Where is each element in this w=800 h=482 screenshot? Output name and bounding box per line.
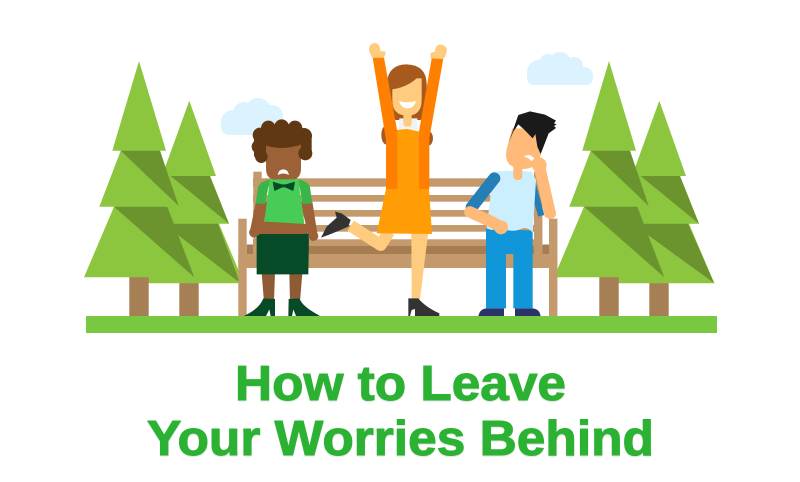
shoes — [244, 298, 320, 316]
front tree — [554, 61, 664, 316]
kicked leg — [351, 226, 389, 245]
tree group: right — [554, 61, 714, 316]
collar — [398, 118, 418, 133]
skirt — [257, 233, 309, 274]
park bench — [238, 172, 557, 316]
fringe — [387, 66, 418, 90]
hair — [509, 111, 557, 154]
front tree — [84, 61, 194, 316]
back tree — [134, 101, 244, 316]
hands — [369, 43, 447, 59]
smile — [399, 101, 416, 108]
legs — [262, 273, 302, 302]
face — [392, 78, 422, 116]
forearm and hands — [249, 222, 318, 241]
sleeves — [256, 179, 312, 204]
cloud: right — [527, 52, 593, 85]
neck and face — [266, 142, 301, 180]
cloud: left — [221, 98, 287, 135]
tree group: left — [84, 61, 244, 316]
bow tie — [273, 182, 295, 191]
hair — [252, 119, 312, 163]
title line 2: Your Worries Behind — [147, 412, 654, 466]
title line 1: How to Leave — [235, 357, 566, 411]
shoes — [478, 308, 541, 316]
fist — [532, 158, 547, 172]
mouth — [278, 169, 289, 175]
person: man in blue — [470, 111, 557, 316]
neck — [403, 113, 412, 127]
face — [506, 128, 541, 169]
elbow — [545, 208, 556, 219]
arms — [250, 202, 317, 233]
title — [147, 357, 654, 466]
orange dress — [377, 129, 432, 234]
ground strip — [86, 316, 717, 333]
lower arm — [470, 212, 501, 227]
standing leg — [411, 232, 428, 299]
raised arm — [533, 165, 556, 217]
hand — [494, 220, 508, 234]
T-shirt — [487, 171, 536, 233]
back hair — [381, 64, 433, 146]
standing shoe — [408, 298, 439, 316]
near sleeve — [472, 178, 494, 207]
person: woman in green — [244, 119, 320, 316]
far sleeve — [533, 180, 544, 217]
neck — [513, 165, 522, 180]
raised shoe — [321, 212, 351, 238]
person: woman in orange — [321, 43, 447, 316]
green shirt — [263, 179, 305, 228]
back tree — [604, 101, 714, 316]
jacket and arms — [373, 58, 443, 189]
trousers — [486, 228, 533, 308]
mouth — [524, 155, 534, 161]
